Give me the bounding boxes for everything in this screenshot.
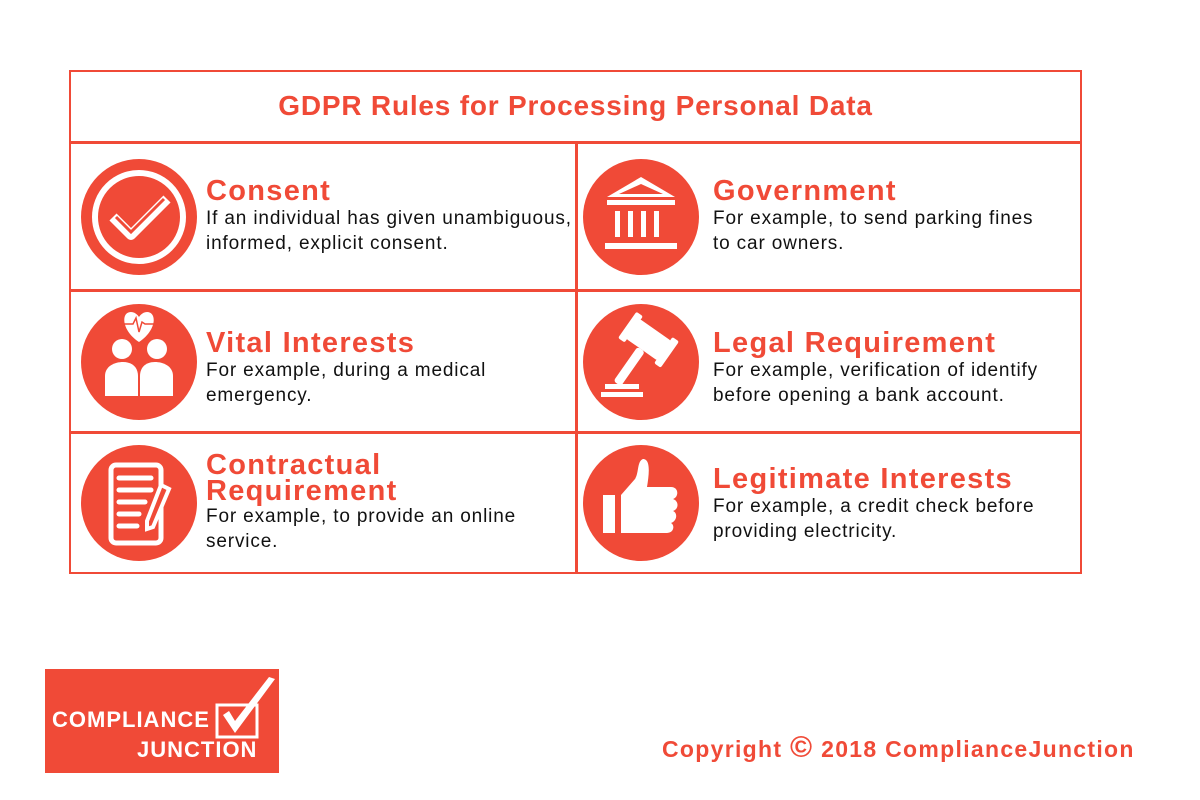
panel: consent: [206, 175, 572, 254]
panel: vital interests: emergency.: [206, 385, 312, 406]
panel: government: [713, 175, 1033, 254]
panel: legitimate interests: providing electricity.: [713, 521, 897, 542]
panel: government: to car owners.: [713, 233, 844, 254]
panel: contractual requirement: For example, to provide an online: [206, 506, 516, 527]
icon: vital interests: [81, 304, 197, 420]
icon: consent check: [81, 159, 197, 275]
panel: contractual requirement: Contractual: [206, 449, 381, 481]
copyright: Copyright © 2018 ComplianceJunction: [662, 731, 1135, 764]
panel: contractual requirement: service.: [206, 531, 278, 552]
panel: contractual requirement: [206, 449, 516, 552]
icon: contract: [81, 445, 197, 561]
icon: thumbs up: [583, 445, 699, 561]
logo: compliance junction: JUNCTION: [137, 737, 257, 762]
panel: legitimate interests: [713, 463, 1034, 542]
panel: legal requirement: [713, 327, 1038, 406]
panel: government: For example, to send parking fines: [713, 208, 1033, 229]
panel: consent: Consent: [206, 175, 331, 207]
panel: legal requirement: Legal Requirement: [713, 327, 996, 359]
logo: compliance junction: COMPLIANCE: [52, 707, 210, 732]
logo: compliance junction: [45, 669, 279, 773]
panel: legal requirement: For example, verification of identify: [713, 360, 1038, 381]
panel: legal requirement: before opening a bank account.: [713, 385, 1005, 406]
panel: legitimate interests: Legitimate Interests: [713, 463, 1013, 495]
table frame: [69, 70, 1082, 574]
panel: consent: informed, explicit consent.: [206, 233, 449, 254]
panel: vital interests: [206, 327, 486, 406]
panel: consent: If an individual has given unambiguous,: [206, 208, 572, 229]
panel: contractual requirement: Requirement: [206, 475, 398, 507]
title: GDPR Rules for Processing Personal Data: [278, 90, 873, 121]
icon: gavel: [583, 304, 699, 420]
panel: government: Government: [713, 175, 897, 207]
panel: vital interests: Vital Interests: [206, 327, 415, 359]
panel: vital interests: For example, during a medical: [206, 360, 486, 381]
icon: government building: [583, 159, 699, 275]
panel: legitimate interests: For example, a credit check before: [713, 496, 1034, 517]
